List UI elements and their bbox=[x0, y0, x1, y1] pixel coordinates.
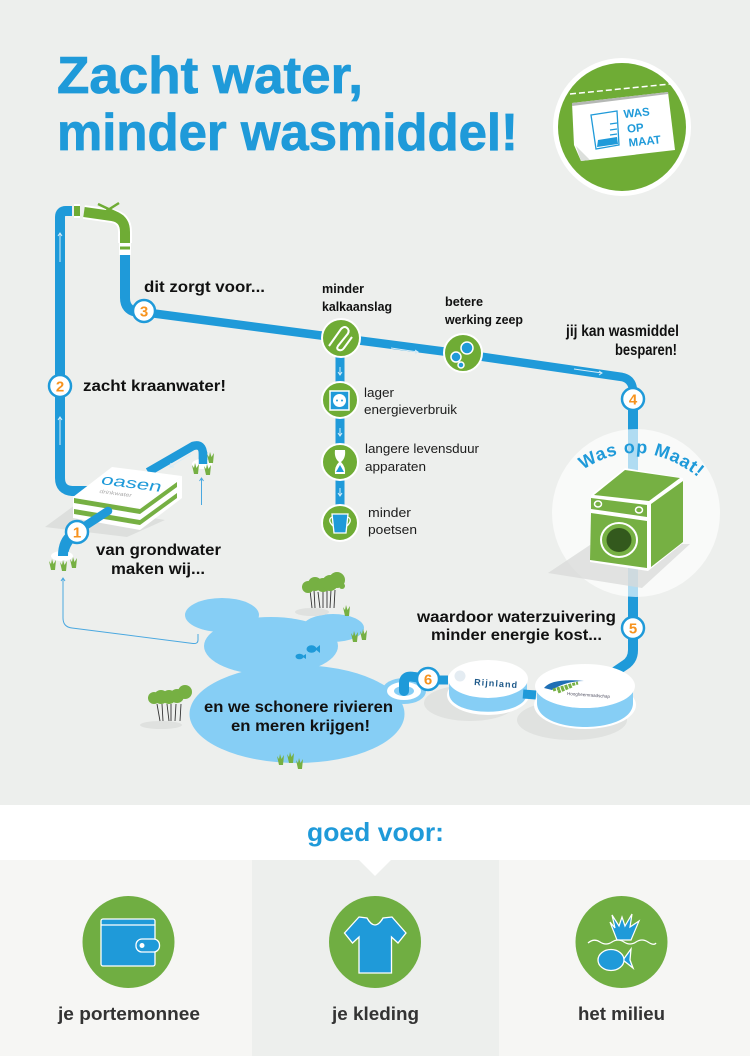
icon: water plant and fish bbox=[576, 896, 668, 988]
text: langere levensduur: langere levensduur bbox=[365, 442, 479, 456]
reeds around lake bbox=[277, 605, 367, 769]
text: step 5: minder energie kost... bbox=[431, 627, 602, 644]
trees upper bbox=[295, 572, 345, 616]
badge: Was op Maat label: OP bbox=[627, 122, 645, 136]
text: betere werking zeep bbox=[444, 295, 523, 327]
icon: t-shirt bbox=[329, 896, 421, 988]
text: lager energieverbruik bbox=[364, 386, 458, 417]
text: minder poetsen: minder bbox=[368, 506, 411, 520]
step marker 6 bbox=[417, 668, 439, 690]
panel: je kleding bbox=[252, 860, 499, 1056]
tank: Rijnland: Rijnland bbox=[474, 677, 517, 690]
text: step 1 bbox=[96, 542, 221, 578]
icon: green tap bbox=[74, 203, 131, 248]
text: step 5: waardoor waterzuivering bbox=[416, 609, 616, 626]
band: goed voor heading bbox=[0, 805, 750, 876]
text: minder poetsen: poetsen bbox=[368, 523, 417, 537]
text: minder kalkaanslag: kalkaanslag bbox=[322, 300, 392, 314]
text: minder kalkaanslag bbox=[322, 282, 392, 314]
arrow: lake water to well left bbox=[61, 578, 198, 644]
text: step 1: van grondwater bbox=[96, 542, 221, 559]
panel: je portemonnee bbox=[0, 860, 252, 1056]
icon: hourglass bbox=[322, 444, 358, 480]
trees lower bbox=[140, 685, 192, 729]
text: lager energieverbruik: lager bbox=[364, 386, 394, 400]
icon: fish in lake bbox=[296, 645, 320, 659]
text: langere levensduur bbox=[365, 442, 479, 474]
icon: power socket bbox=[322, 382, 358, 418]
tank: waterschap bbox=[517, 664, 636, 740]
step marker 2: 2 bbox=[56, 378, 64, 396]
step marker 1 bbox=[66, 521, 88, 543]
icon: bubbles bbox=[444, 334, 482, 372]
text: betere werking zeep: werking zeep bbox=[444, 313, 523, 327]
icon: bucket bbox=[322, 505, 358, 541]
tank: waterschap: Hoogheemraadschap bbox=[567, 691, 611, 699]
arrow: groundwater to well right bbox=[200, 478, 204, 505]
step marker 3 bbox=[133, 300, 155, 322]
connector pipe between tanks bbox=[523, 694, 536, 695]
illustration: washing machine bbox=[548, 429, 720, 597]
text: wasmiddel besparen bbox=[565, 323, 679, 359]
text: betere werking zeep: betere bbox=[445, 295, 483, 309]
text: step 6 bbox=[204, 699, 393, 735]
panel: het milieu: het milieu bbox=[578, 1003, 665, 1024]
panel: het milieu bbox=[499, 860, 750, 1056]
badge: Was op Maat label: WAS bbox=[623, 106, 651, 121]
text: step 6: en we schonere rivieren bbox=[204, 699, 393, 716]
icon: limescale coil bbox=[322, 319, 360, 357]
text: step 2: zacht kraanwater! bbox=[83, 378, 226, 395]
text: step 5 bbox=[416, 609, 616, 644]
text: step 1: maken wij... bbox=[111, 561, 205, 578]
step marker 5 bbox=[622, 617, 644, 639]
illustration: Oasen building: drinkwater bbox=[98, 489, 133, 499]
title bbox=[57, 47, 518, 162]
step marker 6: 6 bbox=[424, 672, 432, 688]
badge: Was op Maat label: MAAT bbox=[628, 134, 661, 150]
illustration: Oasen building bbox=[45, 467, 182, 537]
icon: well ring left bbox=[49, 535, 77, 571]
illustration: Oasen building: oasen bbox=[99, 471, 164, 495]
step marker 3: 3 bbox=[140, 304, 148, 320]
step marker 4: 4 bbox=[629, 392, 638, 408]
band: goed voor heading: goed voor: bbox=[307, 817, 444, 847]
icon: outflow pipe bbox=[382, 677, 448, 704]
step marker 4 bbox=[622, 388, 644, 410]
step marker 1: 1 bbox=[73, 524, 81, 542]
panel: je kleding: je kleding bbox=[331, 1003, 419, 1024]
title: Zacht water, bbox=[57, 47, 363, 105]
icon: well ring right bbox=[192, 452, 214, 475]
text: step 6: en meren krijgen! bbox=[231, 718, 370, 735]
step marker 2 bbox=[49, 375, 71, 397]
step marker 5: 5 bbox=[629, 620, 637, 638]
text: wasmiddel besparen: jij kan wasmiddel bbox=[565, 323, 679, 340]
tank: Rijnland bbox=[424, 660, 529, 721]
text: step 3: dit zorgt voor... bbox=[144, 279, 265, 296]
flow arrows on pipes bbox=[58, 233, 602, 496]
text: langere levensduur: apparaten bbox=[365, 460, 426, 474]
lake bbox=[185, 598, 404, 763]
icon: wallet bbox=[82, 896, 174, 988]
curved heading: Was op Maat!: Was op Maat! bbox=[577, 443, 704, 476]
text: minder kalkaanslag: minder bbox=[322, 282, 364, 296]
title: minder wasmiddel! bbox=[57, 104, 518, 162]
panel: je portemonnee: je portemonnee bbox=[57, 1003, 200, 1024]
text: minder poetsen bbox=[368, 506, 417, 537]
text: lager energieverbruik: energieverbruik bbox=[364, 403, 458, 417]
badge: Was op Maat label bbox=[553, 58, 691, 196]
text: wasmiddel besparen: besparen! bbox=[615, 342, 677, 359]
pipe: main water line bbox=[60, 211, 633, 682]
